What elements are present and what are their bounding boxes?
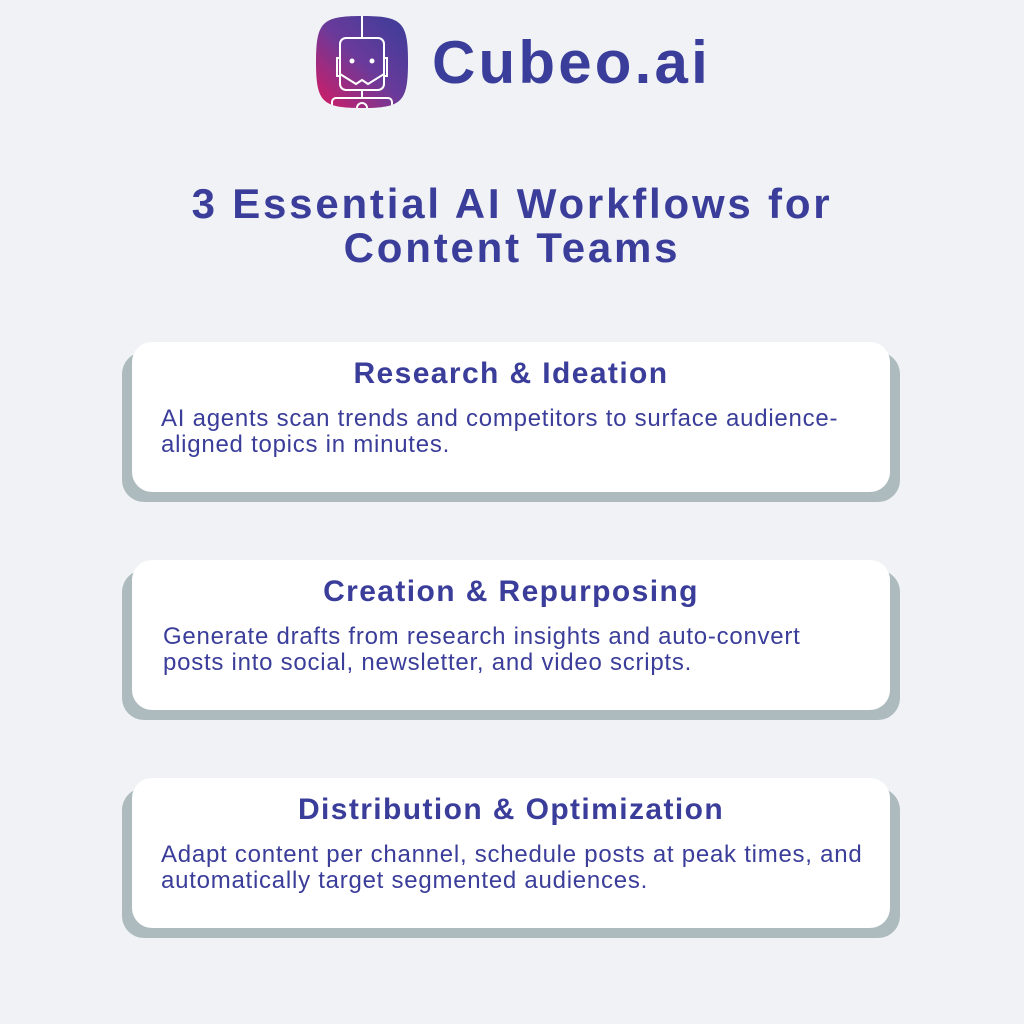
brand name: Cubeo.ai [432, 29, 711, 96]
title: 3 Essential AI Workflows for [192, 180, 832, 227]
text: distribution: automatically target segmented audiences. [161, 867, 648, 894]
heading: creation: Creation & Repurposing [323, 575, 699, 608]
panel: research [122, 342, 900, 502]
text: research: aligned topics in minutes. [161, 431, 450, 458]
logo [316, 16, 711, 108]
text: creation [163, 623, 801, 676]
icon: robot [316, 16, 408, 108]
text: distribution: Adapt content per channel, schedule posts at peak times, and [161, 841, 862, 868]
text: creation: Generate drafts from research insights and auto-convert [163, 623, 801, 650]
title [192, 180, 832, 271]
panel: creation [122, 560, 900, 720]
text: research: AI agents scan trends and competitors to surface audience- [161, 405, 838, 432]
panel: distribution [122, 778, 900, 938]
text: creation: posts into social, newsletter, and video scripts. [163, 649, 692, 676]
heading: research: Research & Ideation [353, 357, 669, 390]
text: research [161, 405, 838, 458]
text: distribution [161, 841, 862, 894]
heading: distribution: Distribution & Optimization [298, 793, 724, 826]
title: Content Teams [344, 224, 680, 271]
